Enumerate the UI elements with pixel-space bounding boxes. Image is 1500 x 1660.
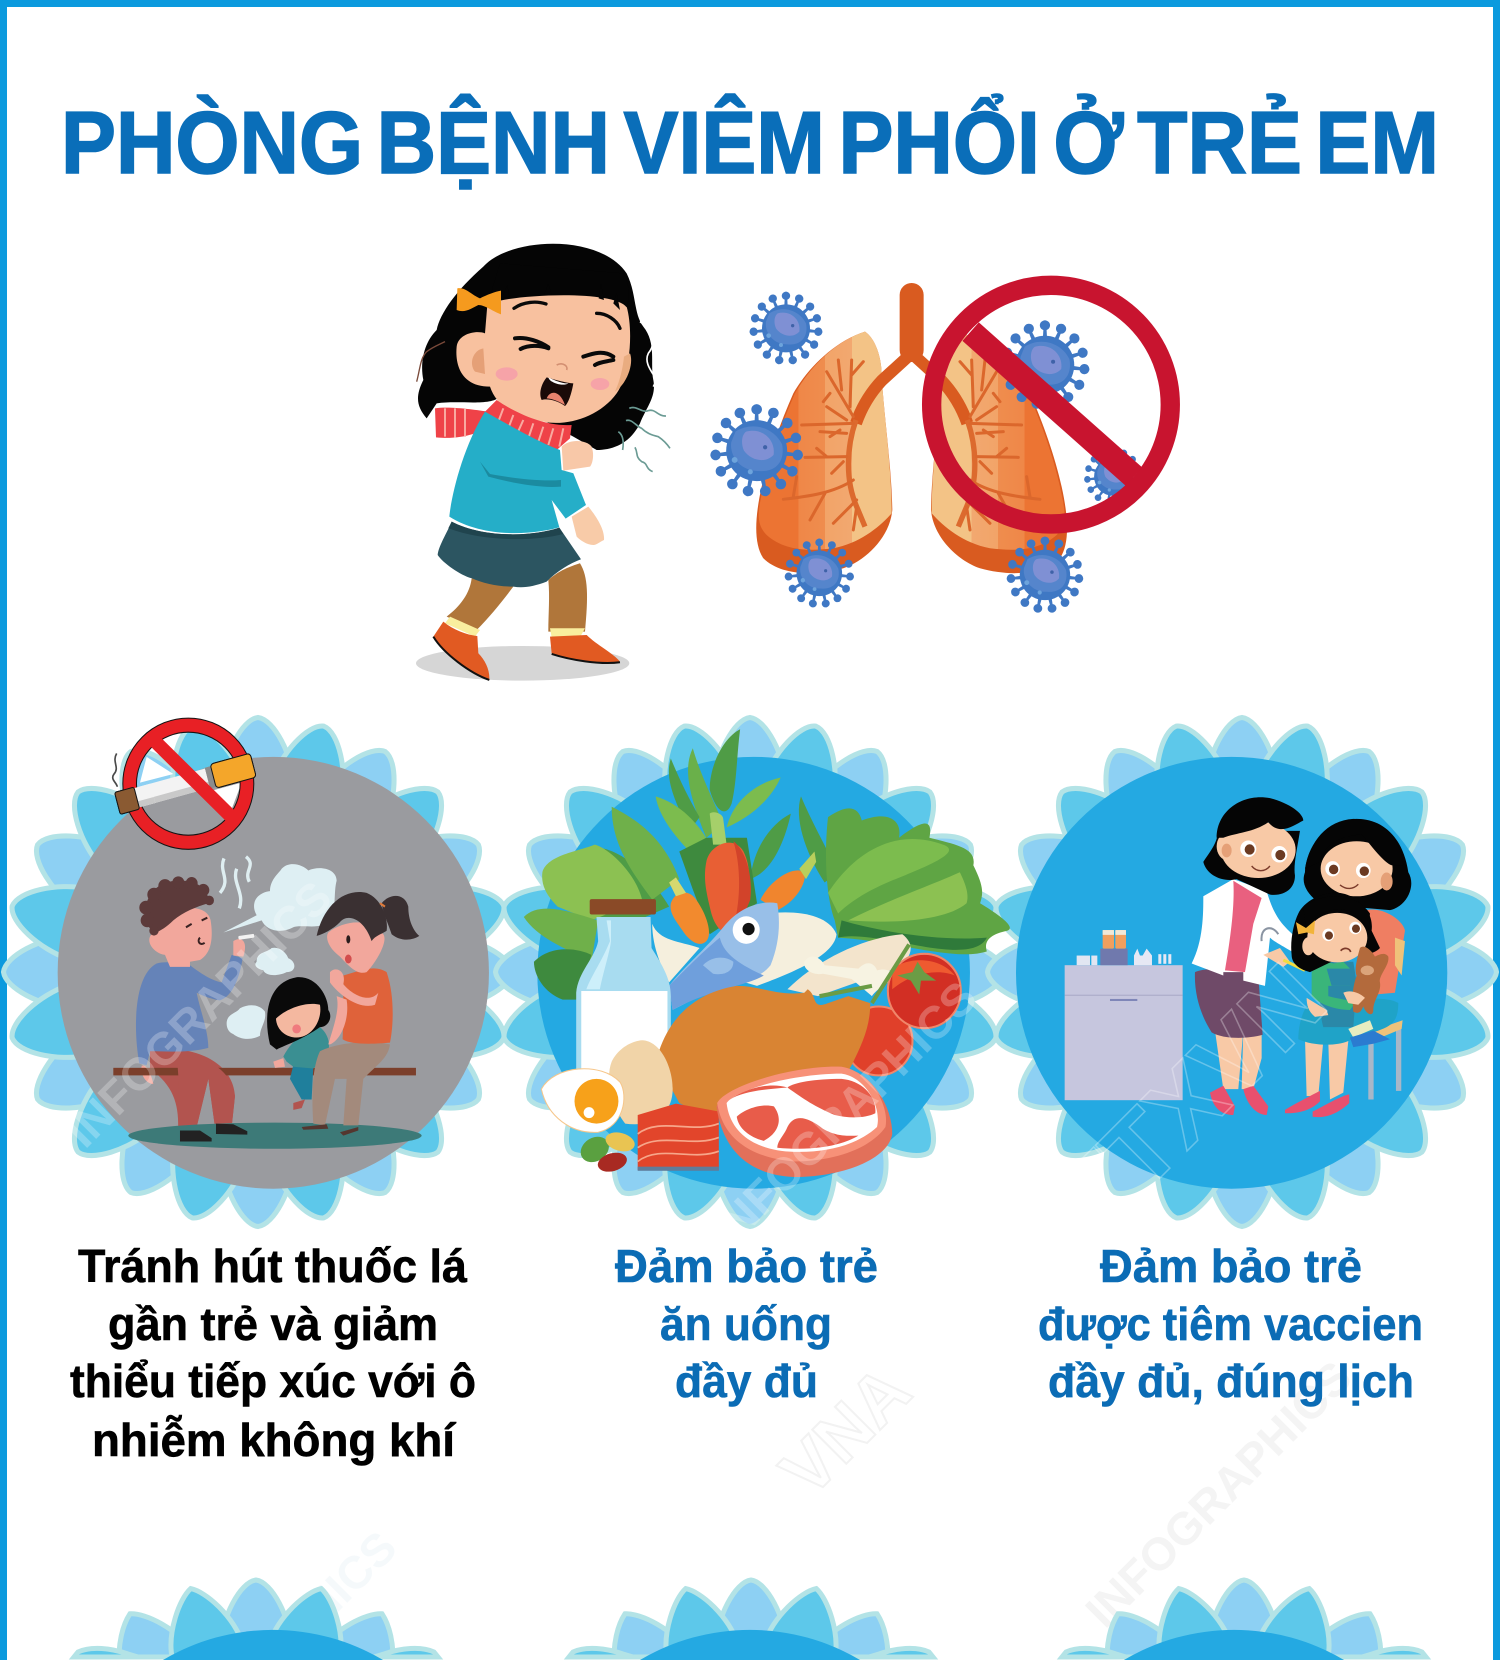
salmon slice xyxy=(638,1104,719,1171)
panel: vaccination xyxy=(1016,757,1447,1189)
text: avoid smoking: gần trẻ và giảm xyxy=(108,1298,438,1350)
watermarks: INFOGRAPHICS xyxy=(700,971,986,1257)
text: full vaccination: Đảm bảo trẻ xyxy=(1100,1240,1362,1292)
watermarks: INFOGRAPHICS xyxy=(1075,1351,1361,1637)
text: avoid smoking: thiểu tiếp xúc với ô xyxy=(70,1355,476,1407)
text: full vaccination: được tiêm vaccien xyxy=(1038,1298,1423,1350)
white radishes xyxy=(652,912,911,996)
watermarks: PHICS xyxy=(270,1521,406,1657)
roast chicken xyxy=(658,986,870,1113)
milk bottle xyxy=(576,899,671,1074)
text: avoid smoking: Tránh hút thuốc lá xyxy=(78,1240,467,1292)
text: avoid smoking: nhiễm không khí xyxy=(92,1414,457,1466)
text: adequate nutrition xyxy=(615,1240,878,1407)
text: full vaccination xyxy=(1038,1240,1423,1407)
fried egg xyxy=(541,1069,624,1132)
text: adequate nutrition: đầy đủ xyxy=(675,1355,818,1407)
panel row 1 flowers xyxy=(3,717,1497,1227)
virus cluster xyxy=(710,292,1143,614)
tomatoes xyxy=(820,945,961,1075)
icon: no smoking sign xyxy=(113,725,256,842)
child xyxy=(267,977,330,1110)
title: PHÒNG BỆNH VIÊM PHỔI Ở TRẺ EM xyxy=(61,93,1439,192)
text: adequate nutrition: ăn uống xyxy=(660,1298,832,1350)
watermarks: TTXVN xyxy=(1036,943,1347,1254)
beans xyxy=(576,1129,637,1175)
icon: trachea xyxy=(876,295,948,350)
icon: right lung xyxy=(907,332,1067,573)
panel: balanced diet food xyxy=(524,729,1010,1189)
panel: no smoking xyxy=(58,725,489,1189)
doctor xyxy=(1192,797,1305,1115)
mother xyxy=(1285,819,1411,1117)
illustration: lungs with viruses and prohibition sign xyxy=(710,285,1170,614)
text: adequate nutrition: Đảm bảo trẻ xyxy=(615,1240,878,1292)
man xyxy=(136,876,255,1127)
watermarks: VNA xyxy=(765,1351,925,1511)
woman xyxy=(302,892,419,1136)
leafy greens xyxy=(524,729,1010,1000)
child with bear xyxy=(1291,893,1390,1047)
fish xyxy=(669,903,779,1010)
bone xyxy=(804,956,893,996)
bench xyxy=(113,1068,416,1075)
panel row 2 flowers and circles xyxy=(74,1580,1426,1660)
shoes xyxy=(180,1124,247,1142)
carrots xyxy=(669,841,816,944)
illustration: coughing girl xyxy=(416,244,670,681)
smoke xyxy=(223,864,337,1039)
text: full vaccination: đầy đủ, đúng lịch xyxy=(1048,1355,1414,1407)
text: avoid smoking xyxy=(70,1240,476,1466)
watermarks: INFOGRAPHICS xyxy=(55,871,341,1157)
whole egg xyxy=(609,1040,673,1124)
cabinet with vials xyxy=(1065,930,1183,1100)
steak xyxy=(716,1067,892,1177)
watermarks xyxy=(55,871,1361,1657)
chair xyxy=(1368,1020,1403,1100)
man legs overlap xyxy=(177,1058,235,1127)
icon: left lung xyxy=(756,332,916,573)
ground shadow xyxy=(128,1123,422,1149)
icon: prohibition sign xyxy=(932,285,1170,524)
